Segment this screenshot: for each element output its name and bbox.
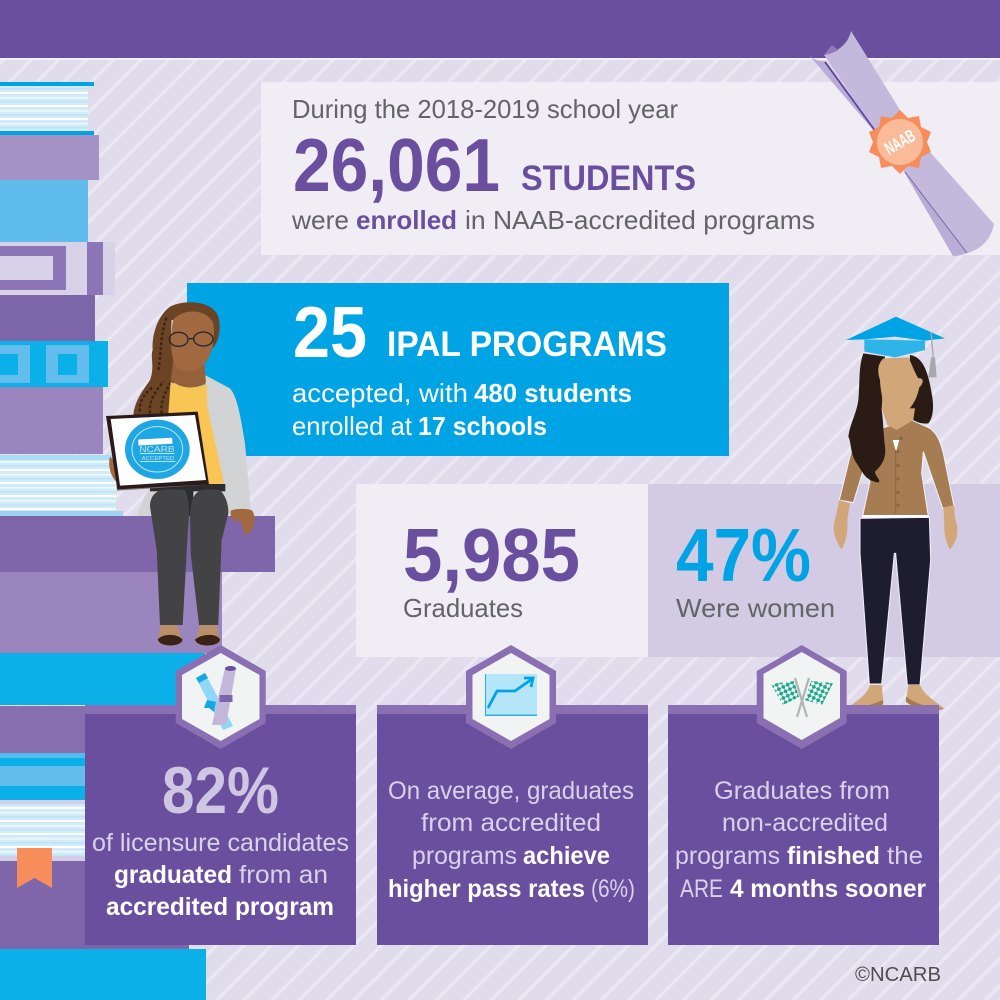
text: enrolled line: were bbox=[291, 205, 349, 235]
text: school year: During the 2018-2019 school year bbox=[292, 94, 678, 124]
text: accepted line bbox=[292, 378, 632, 408]
text: programs achieve bbox=[412, 842, 610, 870]
graduation cap bbox=[846, 317, 945, 377]
text: 4 months sooner: 4 months sooner bbox=[730, 875, 926, 903]
text: accredited program: accredited program bbox=[106, 893, 334, 921]
icon: hexagon with rising chart bbox=[466, 645, 556, 749]
text: programs finished the: the bbox=[887, 842, 923, 870]
icon: orange bookmark bbox=[17, 848, 52, 888]
text: enrolled schools line: enrolled at bbox=[292, 411, 413, 441]
laptop with NCARB accepted seal bbox=[106, 412, 209, 491]
illustration: seated woman with laptop bbox=[106, 302, 255, 645]
panel: women bbox=[648, 484, 1000, 657]
panel: finished sooner bbox=[668, 705, 939, 945]
text: on average: On average, graduates bbox=[388, 777, 634, 805]
laptop with NCARB accepted seal: ACCEPTED bbox=[142, 456, 174, 462]
laptop with NCARB accepted seal: NCARB bbox=[139, 445, 175, 454]
panel: enrolled students bbox=[261, 82, 1000, 255]
text: graduated from an: from an bbox=[239, 861, 328, 889]
number: 47%: 47% bbox=[676, 513, 811, 597]
text: accepted line: accepted, with bbox=[292, 378, 468, 408]
label: were women: Were women bbox=[676, 593, 835, 623]
number: 5,985: 5,985 bbox=[403, 513, 580, 597]
icon: diploma with seal bbox=[809, 31, 994, 256]
text: higher pass rates: higher pass rates bbox=[388, 875, 585, 903]
label: students: STUDENTS bbox=[521, 159, 696, 198]
text: enrolled line: enrolled bbox=[356, 205, 457, 235]
panel: licensure candidates bbox=[85, 705, 356, 945]
text: enrolled line bbox=[291, 205, 815, 235]
illustration: stack of books bbox=[0, 82, 275, 1000]
text: enrolled schools line: 17 schools bbox=[418, 411, 547, 441]
text: non-accredited: non-accredited bbox=[722, 809, 888, 837]
text: graduates from: Graduates from bbox=[714, 777, 890, 805]
number: 25: 25 bbox=[293, 293, 367, 373]
text: accepted line: 480 students bbox=[474, 378, 632, 408]
text: 4 months sooner: ARE bbox=[680, 875, 723, 903]
panel: IPAL programs bbox=[187, 283, 729, 456]
label: graduates: Graduates bbox=[403, 593, 523, 623]
icon: diploma with seal: NAAB bbox=[881, 125, 919, 159]
panel: graduates bbox=[356, 484, 648, 657]
text: programs achieve: programs bbox=[412, 842, 517, 870]
text: licensure candidates: of licensure candidates bbox=[92, 829, 349, 857]
label: IPAL programs: IPAL PROGRAMS bbox=[387, 325, 667, 364]
text: higher pass rates: (6%) bbox=[591, 875, 635, 903]
number: 26,061: 26,061 bbox=[293, 123, 500, 207]
illustration: standing graduate woman bbox=[834, 317, 957, 711]
icon: hexagon with checkered flags bbox=[757, 645, 847, 749]
text: from accredited: from accredited bbox=[421, 809, 601, 837]
text: enrolled schools line bbox=[292, 411, 547, 441]
text: graduated from an: graduated bbox=[114, 861, 232, 889]
icon: hexagon with diplomas bbox=[176, 645, 266, 749]
text: programs finished the: finished bbox=[787, 842, 880, 870]
panel: higher pass rates bbox=[377, 705, 648, 945]
text: graduated from an bbox=[114, 861, 328, 889]
text: programs finished the bbox=[675, 842, 923, 870]
copyright: ©NCARB bbox=[855, 964, 941, 986]
text: programs achieve: achieve bbox=[523, 842, 610, 870]
text: enrolled line: in NAAB-accredited programs bbox=[465, 205, 815, 235]
text: programs finished the: programs bbox=[675, 842, 780, 870]
top banner bbox=[0, 0, 1000, 60]
number: 82%: 82% bbox=[162, 753, 279, 827]
